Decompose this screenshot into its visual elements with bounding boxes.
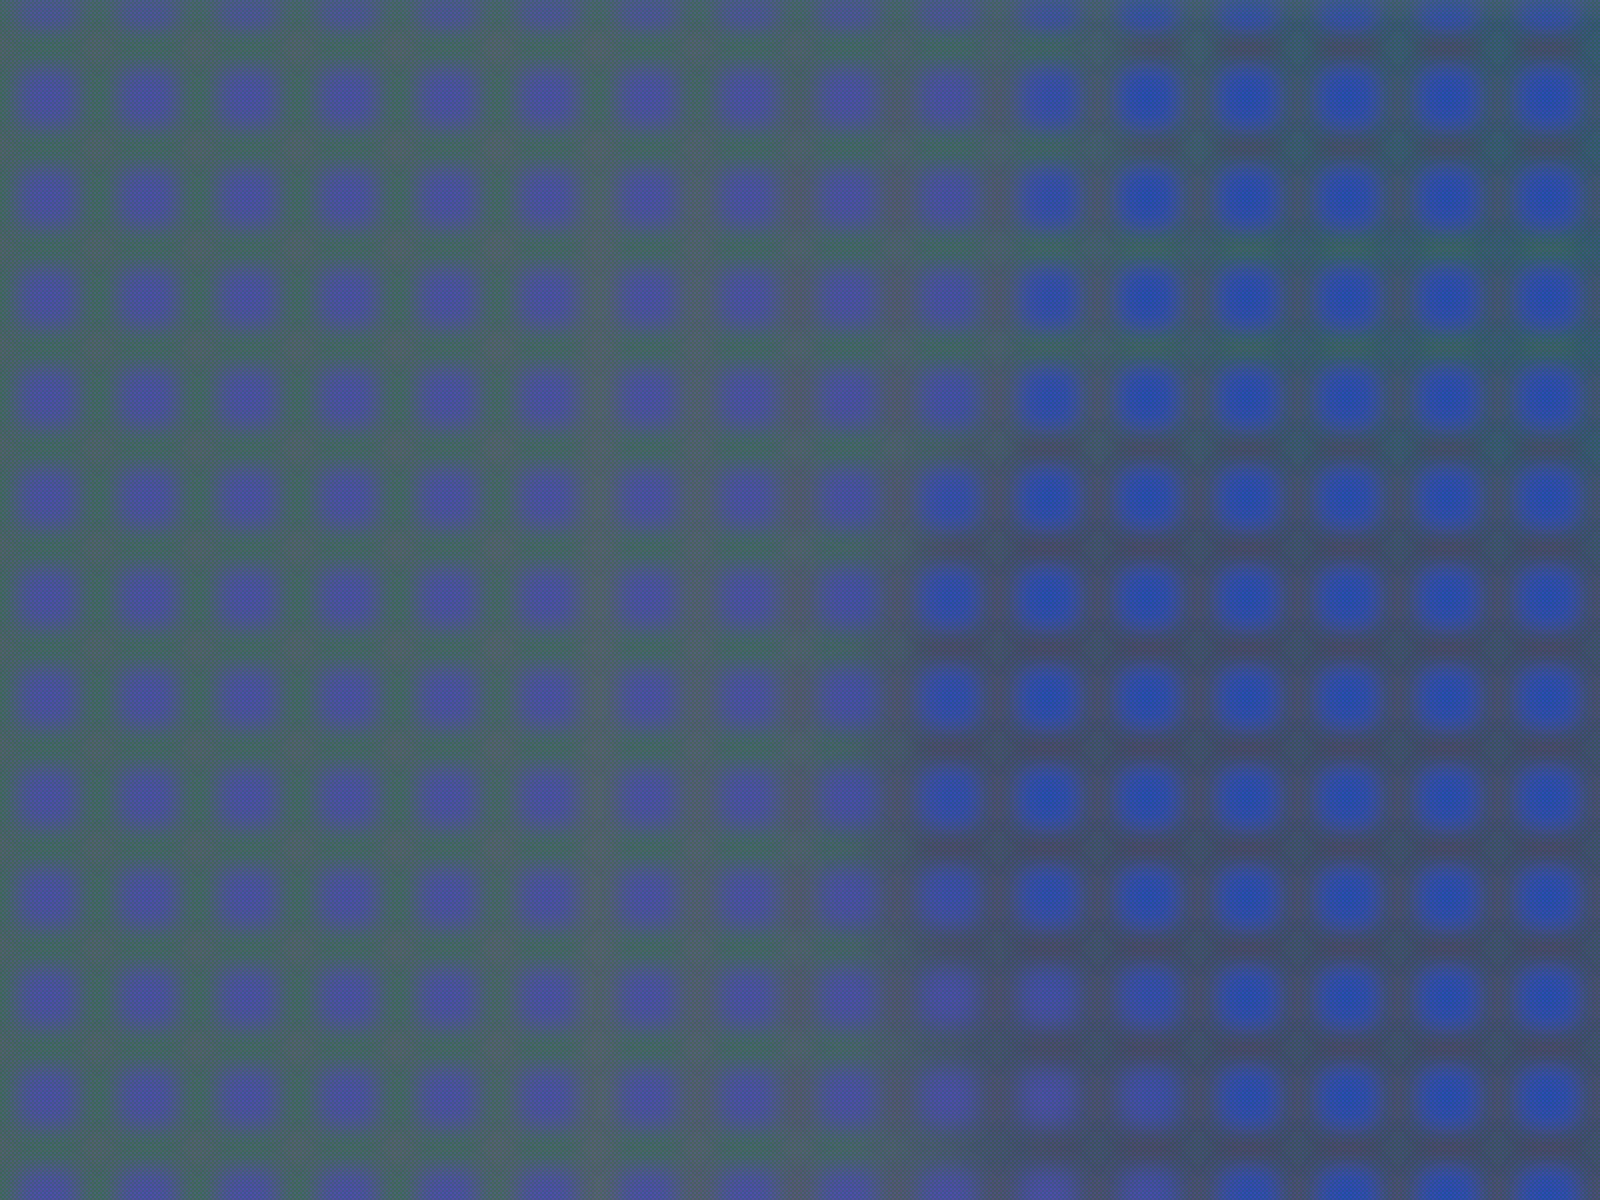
vertical purple bars right side [794, 88, 1600, 1086]
saturated blue blob grid right side [918, 0, 1584, 1200]
vertical green bars left side [0, 6, 802, 1200]
top edge fade [0, 0, 1600, 24]
darker purple tint lower right [890, 518, 1600, 1192]
horizontal purple bars right side [1026, 36, 1574, 551]
